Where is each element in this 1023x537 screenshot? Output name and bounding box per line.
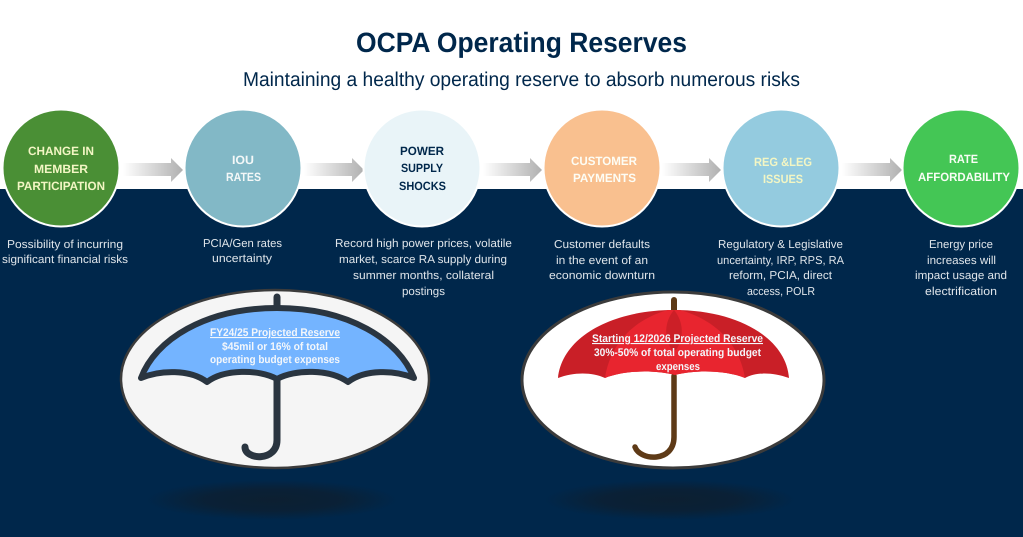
title: OCPA Operating Reserves [356, 27, 687, 58]
description: IOU rates [203, 238, 282, 265]
red umbrella tip [671, 300, 677, 312]
description: regulatory and legislative: reform, PCIA, direct [729, 270, 833, 282]
risk circle: power supply shocks [364, 110, 480, 226]
description: member participation: significant financial risks [2, 254, 128, 266]
blue umbrella text: $45mil or 16% of total [222, 341, 328, 353]
description: customer payments [549, 239, 655, 282]
umbrella panel: starting 12/2026 projected reserve [522, 292, 824, 468]
description: regulatory and legislative: Regulatory & Legislative [718, 239, 843, 251]
description: regulatory and legislative: access, POLR [747, 286, 815, 298]
arrow 3 [483, 158, 542, 182]
risk circle: change in member participation: PARTICIPATION [17, 179, 105, 193]
description: power supply shocks [335, 238, 512, 298]
blue umbrella handle [245, 378, 277, 457]
blue umbrella text: operating budget expenses [210, 354, 340, 366]
risk circle: regulatory and legislative issues [722, 110, 840, 226]
arrow 1 [123, 158, 183, 182]
arrow 5 [842, 158, 902, 182]
description: regulatory and legislative: uncertainty, IRP, RPS, RA [717, 255, 844, 267]
risk circle: IOU rates: IOU [232, 153, 254, 167]
shadow under blue umbrella [147, 480, 397, 520]
risk circle: power supply shocks: POWER [400, 144, 444, 158]
risk circle: rate affordability: AFFORDABILITY [918, 170, 1010, 184]
description: customer payments: in the event of an [556, 255, 648, 267]
description: power supply shocks: postings [402, 286, 445, 298]
blue umbrella tip [274, 297, 280, 308]
description: rate affordability: impact usage and [915, 270, 1007, 282]
description: rate affordability: Energy price [929, 239, 993, 251]
risk circle: power supply shocks: SHOCKS [399, 179, 446, 193]
risk circle: customer payments: PAYMENTS [573, 171, 636, 185]
blue umbrella text: FY24/25 Projected Reserve [210, 327, 340, 339]
red umbrella text: expenses [656, 361, 700, 373]
risk circle: customer payments [544, 110, 660, 226]
red umbrella text: 30%-50% of total operating budget [594, 347, 761, 359]
risk circle: customer payments: CUSTOMER [571, 154, 637, 168]
description: rate affordability [915, 239, 1007, 298]
description: power supply shocks: Record high power prices, volatile [335, 238, 512, 250]
risk circle: change in member participation [2, 110, 120, 226]
description: rate affordability: increases will [927, 255, 996, 267]
description: customer payments: economic downturn [549, 270, 655, 282]
red umbrella text: Starting 12/2026 Projected Reserve [592, 333, 763, 345]
risk circle: regulatory and legislative issues: ISSUES [763, 172, 803, 186]
umbrella panel: FY24/25 projected reserve [121, 290, 429, 468]
description: customer payments: Customer defaults [554, 239, 650, 251]
arrow 4 [662, 158, 721, 182]
risk circle: IOU rates: RATES [226, 170, 261, 184]
risk circle: change in member participation: MEMBER [34, 162, 88, 176]
description: rate affordability: electrification [925, 286, 997, 298]
risk circle: rate affordability [902, 110, 1020, 226]
risk circle: IOU rates [184, 110, 302, 226]
description: power supply shocks: summer months, collateral [353, 270, 494, 282]
navy background panel [0, 189, 1023, 537]
description: IOU rates: uncertainty [212, 253, 272, 265]
description: IOU rates: PCIA/Gen rates [203, 238, 282, 250]
description: regulatory and legislative [717, 239, 844, 298]
subtitle: Maintaining a healthy operating reserve to absorb numerous risks [243, 69, 800, 91]
risk circle: rate affordability: RATE [949, 152, 978, 166]
shadow under red umbrella [545, 480, 795, 520]
red umbrella text [592, 333, 763, 373]
arrow 2 [304, 158, 364, 182]
red umbrella canopy [558, 310, 789, 378]
description: power supply shocks: market, scarce RA supply during [339, 254, 507, 266]
blue umbrella canopy [141, 308, 414, 382]
risk circle: regulatory and legislative issues: REG &LEG [754, 155, 812, 169]
red umbrella handle [635, 376, 674, 457]
risk circle: change in member participation: CHANGE IN [28, 144, 94, 158]
description: member participation: Possibility of incurring [7, 239, 123, 251]
description: member participation [2, 239, 128, 266]
risk circle: power supply shocks: SUPPLY [401, 161, 443, 175]
blue umbrella text [210, 327, 340, 366]
